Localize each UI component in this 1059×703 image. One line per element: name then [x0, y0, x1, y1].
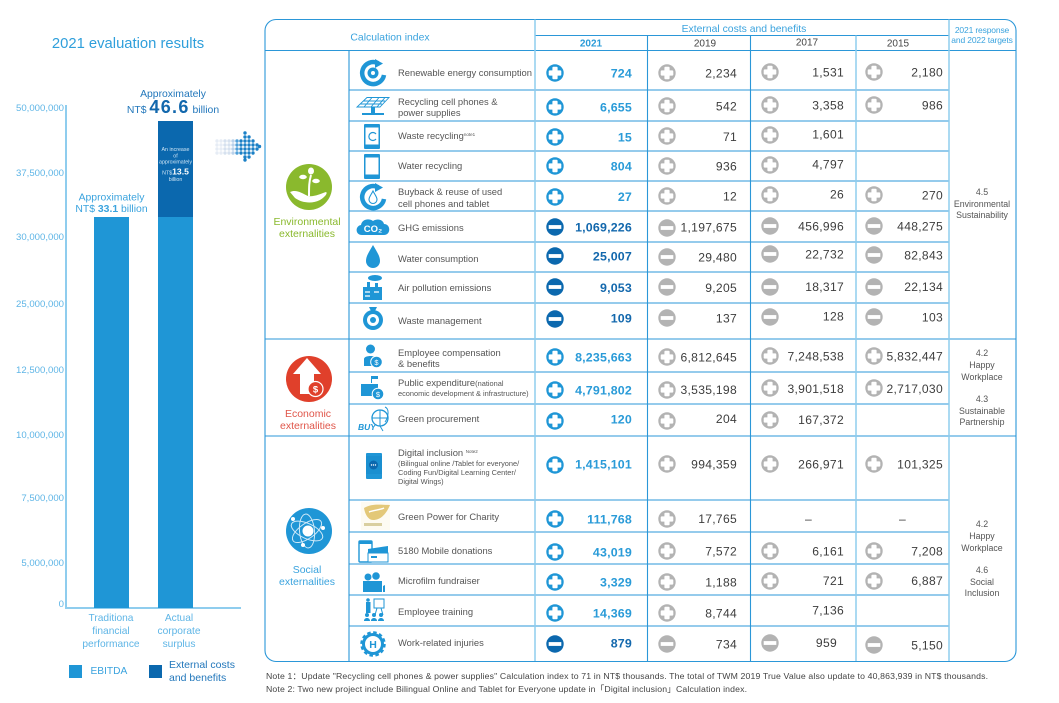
table header: 2021 response [955, 25, 1010, 35]
bar inner label: of [173, 154, 178, 160]
row: microfilm fundraiser: 6,887 [911, 574, 943, 588]
row: air pollution emissions: 22,134 [904, 280, 943, 294]
panel: economic externalities category: Economic [285, 408, 331, 420]
row: waste recycling: 15 [618, 130, 632, 144]
x axis label: actual [157, 613, 201, 650]
x axis label: traditional: Traditiona [89, 613, 134, 624]
row: air pollution emissions: 9,053 [600, 281, 632, 295]
table frame and grid [265, 20, 1016, 662]
row: work-related injuries: 959 [816, 636, 837, 650]
row: water consumption: 22,732 [805, 248, 844, 262]
row: public expenditure: 3,535,198 [680, 383, 737, 397]
panel: environmental externalities category [273, 164, 341, 240]
x axis label: actual: Actual [165, 613, 193, 624]
response targets: social: Inclusion [965, 588, 999, 598]
row: work-related injuries: Work-related injuries [398, 637, 484, 648]
panel: social externalities category [279, 508, 335, 588]
row: green power for charity: Green Power for Charity [398, 511, 499, 522]
row: renewable energy consumption: 1,531 [812, 66, 844, 80]
row: water consumption: 29,480 [698, 250, 737, 264]
row: waste recycling: 71 [723, 130, 737, 144]
icon: water drop in recycle ring [362, 183, 384, 208]
row: buyback and reuse: cell phones and tablet [398, 198, 490, 209]
row: employee compensation and benefits: 6,812,645 [680, 350, 737, 364]
x axis label: actual: surplus [163, 639, 195, 650]
response targets: economic [959, 348, 1005, 427]
bar inner label: An increase [162, 147, 190, 153]
row: employee compensation and benefits: Employee compensation [398, 347, 501, 358]
row: waste recycling: Waste recycling [398, 130, 464, 141]
icon: radioactive waste bag [363, 307, 383, 330]
icon: person with coin: $ [374, 358, 379, 367]
row: renewable energy consumption: Renewable energy consumption [398, 67, 532, 78]
row: renewable energy consumption: 2,234 [705, 66, 737, 80]
row: water recycling: 804 [611, 160, 632, 174]
row: buyback and reuse: 270 [922, 188, 943, 202]
table header: 2017 [796, 38, 819, 48]
icon: CO2 cloud [357, 219, 389, 235]
y axis labels: 0 [59, 599, 64, 610]
row: buyback and reuse [362, 183, 943, 209]
panel: social externalities category: Social [293, 564, 321, 576]
y axis labels: 10,000,000 [16, 430, 64, 441]
icon: CO2 cloud: CO₂ [364, 224, 382, 235]
row: microfilm fundraiser: 721 [823, 574, 844, 588]
footnotes: Note 2: Two new project include Bilingual Online and Tablet for Everyone update in「Digital inclusion」Calculation index. [266, 684, 747, 694]
row: GHG emissions: 456,996 [798, 220, 844, 234]
row: green procurement: Green procurement [398, 413, 480, 424]
row: air pollution emissions: 18,317 [805, 280, 844, 294]
response targets: environmental: Sustainability [956, 210, 1009, 220]
response targets: social: 4.2 [976, 519, 988, 529]
bar inner label: approximately [159, 160, 192, 166]
icon: phone with recycle mark [364, 124, 380, 149]
row: green procurement: 120 [611, 412, 632, 426]
response targets: environmental [954, 187, 1010, 220]
icon: phone and cards [359, 541, 388, 562]
icon: trainer and audience [364, 598, 384, 621]
row: digital inclusion [366, 447, 943, 486]
legend: External costs [169, 659, 235, 671]
footnotes [266, 671, 988, 694]
row: buyback and reuse: 27 [618, 190, 632, 204]
panel: economic externalities category [280, 356, 336, 432]
row: 5180 mobile donations: 6,161 [812, 544, 844, 558]
panel: economic externalities category: externalities [280, 420, 336, 432]
row: waste recycling: note1 [464, 132, 476, 137]
row: employee training: Employee training [398, 606, 473, 617]
response targets: social: Social [970, 577, 994, 587]
row: employee compensation and benefits [364, 344, 943, 369]
row: public expenditure: 4,791,802 [575, 384, 632, 398]
row: 5180 mobile donations: 7,572 [705, 544, 737, 558]
row: microfilm fundraiser: Microfilm fundraiser [398, 575, 480, 586]
row: digital inclusion: Coding Fun/Digital Learning Center/ [398, 468, 517, 477]
row: buyback and reuse: 26 [830, 188, 844, 202]
row: air pollution emissions [363, 275, 943, 300]
table header: Calculation index [350, 32, 430, 44]
row: employee compensation and benefits: 8,235,663 [575, 350, 632, 364]
row: work-related injuries [362, 632, 943, 656]
table header: External costs and benefits [682, 24, 806, 35]
row: work-related injuries: 734 [716, 638, 737, 652]
row: green power for charity: – [899, 512, 906, 526]
panel: social externalities category: externalities [279, 576, 335, 588]
y axis labels: 30,000,000 [16, 232, 64, 243]
icon: H in gear: H [369, 639, 377, 651]
row: employee training: 7,136 [812, 604, 844, 618]
row: recycling cell phones and power supplies: 542 [716, 100, 737, 114]
row: employee compensation and benefits: 5,832,447 [886, 350, 943, 364]
bar inner label [159, 147, 192, 183]
icon: renewable energy [362, 59, 384, 84]
row: renewable energy consumption [362, 59, 943, 84]
row: public expenditure: Public expenditure(national [398, 377, 504, 388]
row: employee training [364, 598, 844, 622]
row: GHG emissions: GHG emissions [398, 222, 464, 233]
y axis labels: 7,500,000 [21, 493, 64, 504]
table header: 2015 [887, 38, 910, 50]
footnotes: Note 1：Update "Recycling cell phones & power supplies" Calculation index to 71 in NT$ thousands. The total of TWM 2019 True Value also update to 40,863,939 in NT$ thousands. [266, 671, 988, 681]
response targets: environmental: Environmental [954, 199, 1010, 209]
panel: economic externalities category: $ [313, 384, 319, 396]
response targets: social [961, 519, 1003, 598]
row: green procurement [358, 407, 844, 432]
response targets: economic: Partnership [960, 417, 1005, 427]
row: recycling cell phones and power supplies: power supplies [398, 107, 461, 118]
icon: gold logo [361, 502, 390, 530]
row: GHG emissions: 1,197,675 [680, 220, 737, 234]
y axis labels: 50,000,000 [16, 103, 64, 114]
row: water recycling: Water recycling [398, 160, 462, 171]
y axis labels: 25,000,000 [16, 299, 64, 310]
row: 5180 mobile donations: 7,208 [911, 544, 943, 558]
response targets: social: Workplace [961, 543, 1003, 553]
bar inner label: NT$13.5 [162, 166, 189, 176]
y axis labels: 5,000,000 [21, 558, 64, 569]
icon: tablet [364, 154, 380, 179]
row: water consumption: 82,843 [904, 248, 943, 262]
x axis label: traditional: financial [92, 626, 130, 637]
row: renewable energy consumption: 724 [611, 66, 632, 80]
row: employee compensation and benefits: 7,248,538 [787, 350, 844, 364]
row: recycling cell phones and power supplies: 986 [922, 98, 943, 112]
row: water recycling: 936 [716, 160, 737, 174]
icon: government building with coin: $ [376, 390, 381, 399]
table header: and 2022 targets [951, 35, 1013, 45]
bar: actual corporate surplus EBITDA [158, 217, 193, 608]
bar value label: 33.1 billion: Approximately [79, 192, 145, 204]
response targets: economic: 4.2 [976, 348, 988, 358]
response targets: social: 4.6 [976, 565, 988, 575]
row: green procurement: 167,372 [798, 413, 844, 427]
response targets: environmental: 4.5 [976, 187, 988, 197]
row: work-related injuries: 5,150 [911, 638, 943, 652]
icon: BUY with globe leaf: BUY [358, 422, 377, 432]
y axis labels: 12,500,000 [16, 365, 64, 376]
row: digital inclusion: Digital inclusion [398, 447, 463, 458]
row: GHG emissions [357, 217, 943, 237]
row: green power for charity: – [805, 512, 812, 526]
row: microfilm fundraiser: 1,188 [705, 576, 737, 590]
table header: 2021 [580, 38, 603, 50]
row: buyback and reuse: Buyback & reuse of used [398, 186, 502, 197]
row: water consumption [366, 245, 943, 268]
panel: environmental externalities category: Environmental [273, 216, 341, 228]
bar chart: evaluation results [16, 89, 241, 650]
icon: solar panel [357, 98, 389, 115]
row: digital inclusion: Digital Wings) [398, 477, 444, 486]
table header: 2019 [694, 38, 717, 50]
row: employee training: 14,369 [593, 606, 632, 620]
row: public expenditure: 2,717,030 [886, 382, 943, 396]
row: recycling cell phones and power supplies [357, 96, 943, 118]
row: green power for charity: 17,765 [698, 512, 737, 526]
y axis labels: 37,500,000 [16, 168, 64, 179]
row: water recycling: 4,797 [812, 158, 844, 172]
bar: traditional financial performance [94, 217, 129, 608]
response targets: economic: 4.3 [976, 394, 988, 404]
row: waste management: 103 [922, 310, 943, 324]
row: recycling cell phones and power supplies: 6,655 [600, 100, 632, 114]
row: green power for charity: 111,768 [587, 512, 632, 526]
icon: BUY with globe leaf [358, 407, 388, 432]
row: green procurement: 204 [716, 412, 737, 426]
icon: film camera [363, 572, 385, 592]
row: water recycling [364, 154, 844, 179]
row: 5180 mobile donations [359, 541, 943, 562]
row: microfilm fundraiser: 3,329 [600, 576, 632, 590]
row: air pollution emissions: Air pollution emissions [398, 282, 492, 293]
response targets: economic: Sustainable [959, 406, 1005, 416]
icon: water drop [366, 245, 380, 268]
row: public expenditure [361, 376, 943, 400]
row: waste management [363, 307, 943, 330]
row: work-related injuries: 879 [611, 636, 632, 650]
row: digital inclusion: Note2 [466, 449, 478, 454]
row: green power for charity [361, 502, 906, 530]
response targets: social: Happy [969, 531, 995, 541]
row: waste management: 128 [823, 310, 844, 324]
row: water consumption: 25,007 [593, 250, 632, 264]
row: GHG emissions: 1,069,226 [575, 220, 632, 234]
row: recycling cell phones and power supplies: 3,358 [812, 98, 844, 112]
bar value label line 2: NT$ 46.6 billion [127, 97, 219, 117]
icon: H in gear [362, 632, 384, 656]
row: waste recycling [364, 124, 844, 149]
table header [350, 24, 1013, 50]
row: waste management: 109 [611, 312, 632, 326]
x axis label: actual: corporate [157, 626, 201, 637]
row: waste management: Waste management [398, 315, 482, 326]
icon: person with coin [364, 344, 382, 368]
legend: and benefits [169, 672, 226, 684]
icon: government building with coin [361, 376, 384, 400]
row: digital inclusion: (Bilingual online /Tablet for everyone/ [398, 459, 520, 468]
row: public expenditure: economic development & infrastructure) [398, 389, 529, 398]
bar: external costs and benefits [158, 121, 193, 217]
row: buyback and reuse: 12 [723, 190, 737, 204]
row: renewable energy consumption: 2,180 [911, 66, 943, 80]
icon: factory with smoke [363, 275, 382, 300]
row: recycling cell phones and power supplies: Recycling cell phones & [398, 96, 498, 107]
row: waste management: 137 [716, 312, 737, 326]
title: 2021 evaluation results: 2021 evaluation results [52, 36, 204, 52]
row: employee training: 8,744 [705, 606, 737, 620]
legend: EBITDA [90, 666, 128, 677]
row: microfilm fundraiser [363, 572, 943, 592]
row: 5180 mobile donations: 43,019 [593, 546, 632, 560]
response targets: economic: Happy [969, 360, 995, 370]
x axis label: traditional [82, 613, 140, 650]
bar value label line 2: NT$ 33.1 billion [75, 204, 148, 215]
y axis labels [16, 103, 64, 610]
icon: dotted arrow [215, 131, 261, 162]
row: waste recycling: 1,601 [812, 128, 844, 142]
row: digital inclusion: 994,359 [691, 458, 737, 472]
row: public expenditure: 3,901,518 [787, 382, 844, 396]
response targets: economic: Workplace [961, 372, 1003, 382]
row: water consumption: Water consumption [398, 253, 478, 264]
bar inner label: billion [169, 177, 182, 183]
icon: tablet with chat bubble [366, 453, 382, 479]
bar value label: 46.6 billion: Approximately [140, 89, 207, 100]
row: digital inclusion: 101,325 [897, 458, 943, 472]
row: digital inclusion: 1,415,101 [575, 458, 632, 472]
row: employee compensation and benefits: & benefits [398, 358, 440, 369]
row: 5180 mobile donations: 5180 Mobile donations [398, 545, 493, 556]
row: air pollution emissions: 9,205 [705, 281, 737, 295]
x axis label: traditional: performance [82, 639, 140, 650]
panel: environmental externalities category: externalities [279, 228, 335, 240]
row: GHG emissions: 448,275 [897, 220, 943, 234]
legend [69, 659, 235, 684]
row: digital inclusion: 266,971 [798, 458, 844, 472]
